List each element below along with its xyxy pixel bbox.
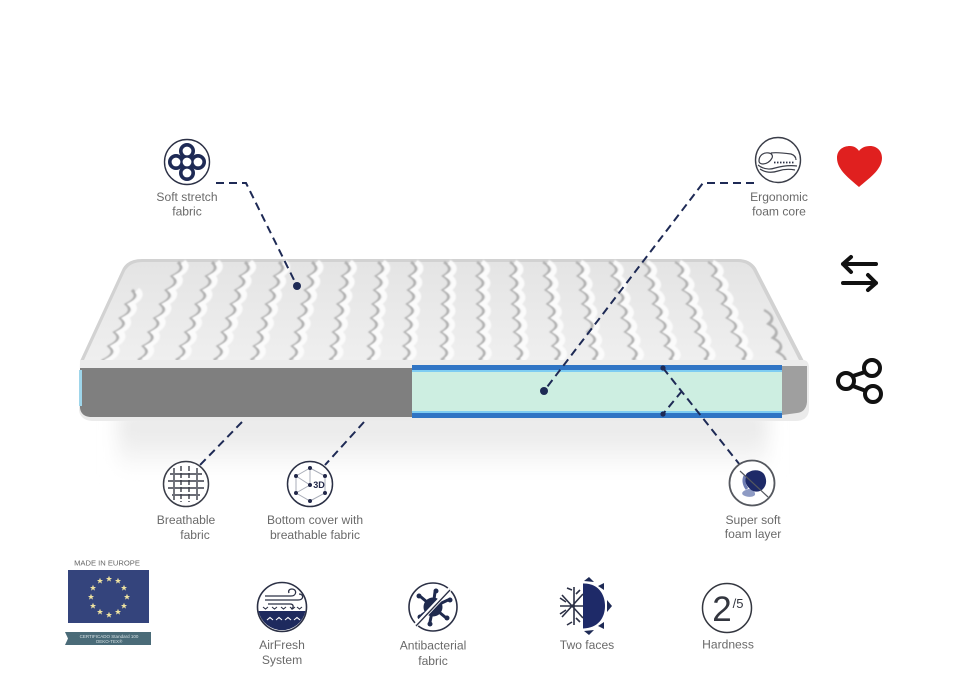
label: super soft foam layer: Super soft: [725, 513, 781, 527]
label: AirFresh system: AirFresh: [259, 638, 305, 652]
label: soft stretch fabric: Soft stretch: [156, 190, 218, 204]
certification ribbon: OEKO-TEX®: [96, 638, 123, 644]
EU flag: [68, 570, 149, 623]
label: hardness: Hardness: [702, 638, 754, 652]
mattress top surface: [80, 259, 804, 408]
icon: hardness 2 of 5: /5: [733, 596, 743, 611]
certification ribbon: [65, 632, 151, 645]
foam cross-section: [412, 365, 782, 418]
quilting lines highlight: [97, 262, 753, 388]
label: AirFresh system: System: [262, 653, 302, 667]
label: super soft foam layer: foam layer: [725, 527, 781, 541]
icon: compare arrows: [843, 257, 876, 290]
floor shadow: [118, 412, 768, 474]
label: bottom cover: Bottom cover with: [267, 513, 363, 527]
label: ergonomic foam core: foam core: [752, 204, 806, 218]
icon: antibacterial fabric: [409, 583, 457, 631]
icon: two faces snowflake and sun: [560, 577, 612, 635]
right grey side fabric: [782, 366, 807, 415]
leader line: ergonomic foam core: [540, 183, 754, 395]
label: soft stretch fabric: fabric: [172, 204, 202, 218]
icon: bottom cover 3D: [288, 462, 332, 506]
icon: bottom cover 3D: 3D: [313, 480, 325, 490]
label: bottom cover: breathable fabric: [270, 528, 360, 542]
icon: breathable fabric: [164, 462, 208, 506]
icon: hardness 2 of 5: [702, 584, 752, 632]
icon: hardness 2 of 5: 2: [712, 590, 732, 629]
badge: made in Europe: [65, 558, 151, 645]
badge title: MADE IN EUROPE: [74, 558, 140, 568]
icon: heart (favourite): [837, 146, 882, 187]
label: breathable fabric: fabric: [180, 528, 210, 542]
mattress illustration: [79, 259, 809, 474]
leader line: bottom cover: [325, 422, 364, 465]
leader line: breathable fabric: [200, 422, 242, 465]
label: antibacterial fabric: fabric: [418, 654, 448, 668]
icon: super soft foam layer: [730, 460, 774, 506]
label: antibacterial fabric: Antibacterial: [400, 638, 466, 652]
icon: ergonomic foam core: [756, 138, 800, 182]
certification ribbon: CERTIFICADO Standard 100: [80, 634, 138, 639]
leader line: super soft foam layer: [660, 365, 740, 465]
leader line: soft stretch fabric: [216, 183, 301, 290]
icon: share: [838, 360, 881, 402]
icon: AirFresh system: [258, 582, 306, 632]
label: two faces: Two faces: [560, 638, 614, 652]
icon: soft stretch fabric: [164, 140, 210, 184]
left blue edge: [79, 370, 82, 406]
label: breathable fabric: Breathable: [157, 513, 215, 527]
quilting lines shadow: [92, 262, 801, 408]
label: ergonomic foam core: Ergonomic: [750, 190, 808, 204]
grey side fabric: [80, 368, 412, 417]
mattress side rim: [79, 360, 809, 421]
